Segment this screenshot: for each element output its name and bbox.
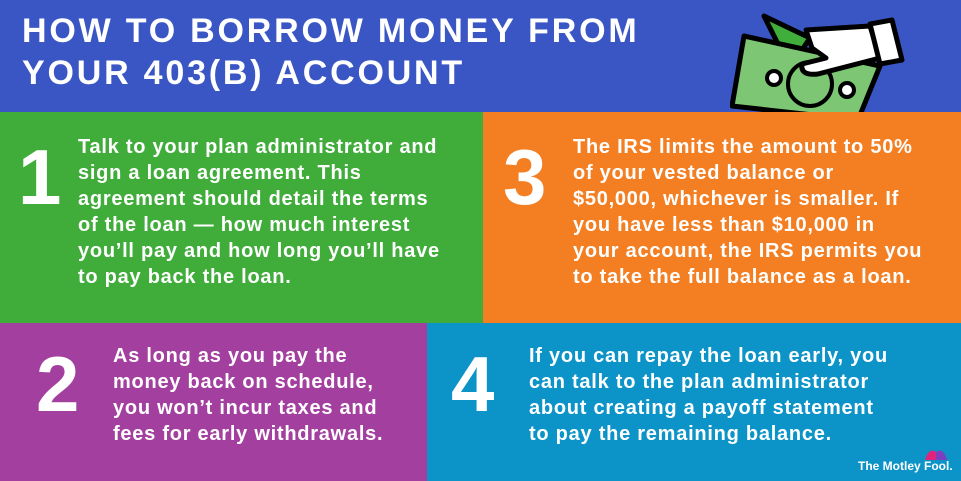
text 4: to pay the remaining balance. xyxy=(529,423,832,445)
title: YOUR 403(B) ACCOUNT xyxy=(22,54,465,92)
text 3: of your vested balance or xyxy=(573,162,834,184)
text 3: $50,000, whichever is smaller. If xyxy=(573,188,899,210)
text 2: fees for early withdrawals. xyxy=(113,423,383,445)
text 1: agreement should detail the terms xyxy=(78,188,428,210)
text 3: you have less than $10,000 in xyxy=(573,214,875,236)
text 4: can talk to the plan administrator xyxy=(529,371,869,393)
number 2: 2 xyxy=(36,340,79,428)
text 1: Talk to your plan administrator and xyxy=(78,136,437,158)
panel 2 xyxy=(0,323,427,481)
text 2: As long as you pay the xyxy=(113,345,347,367)
icon: hand with money xyxy=(730,14,904,112)
header xyxy=(0,0,961,112)
title xyxy=(22,12,639,92)
number 3: 3 xyxy=(503,133,546,221)
panel 4 xyxy=(427,323,961,481)
text 1: sign a loan agreement. This xyxy=(78,162,362,184)
panel 1 xyxy=(0,112,483,323)
number 4: 4 xyxy=(451,340,494,428)
text 4: about creating a payoff statement xyxy=(529,397,874,419)
title: HOW TO BORROW MONEY FROM xyxy=(22,12,639,50)
text 3: The IRS limits the amount to 50% xyxy=(573,136,913,158)
text 2: money back on schedule, xyxy=(113,371,374,393)
text 1 xyxy=(78,136,440,288)
text 1: to pay back the loan. xyxy=(78,266,292,288)
text 2: you won’t incur taxes and xyxy=(113,397,377,419)
text 3 xyxy=(573,136,922,288)
text 3: your account, the IRS permits you xyxy=(573,240,922,262)
text 4: If you can repay the loan early, you xyxy=(529,345,888,367)
logo: The Motley Fool. xyxy=(858,459,953,473)
text 4 xyxy=(529,345,888,445)
panel 3 xyxy=(483,112,961,323)
text 1: you’ll pay and how long you’ll have xyxy=(78,240,440,262)
text 1: of the loan — how much interest xyxy=(78,214,410,236)
logo xyxy=(858,450,953,473)
text 3: to take the full balance as a loan. xyxy=(573,266,912,288)
text 2 xyxy=(113,345,383,445)
number 1: 1 xyxy=(18,133,61,221)
